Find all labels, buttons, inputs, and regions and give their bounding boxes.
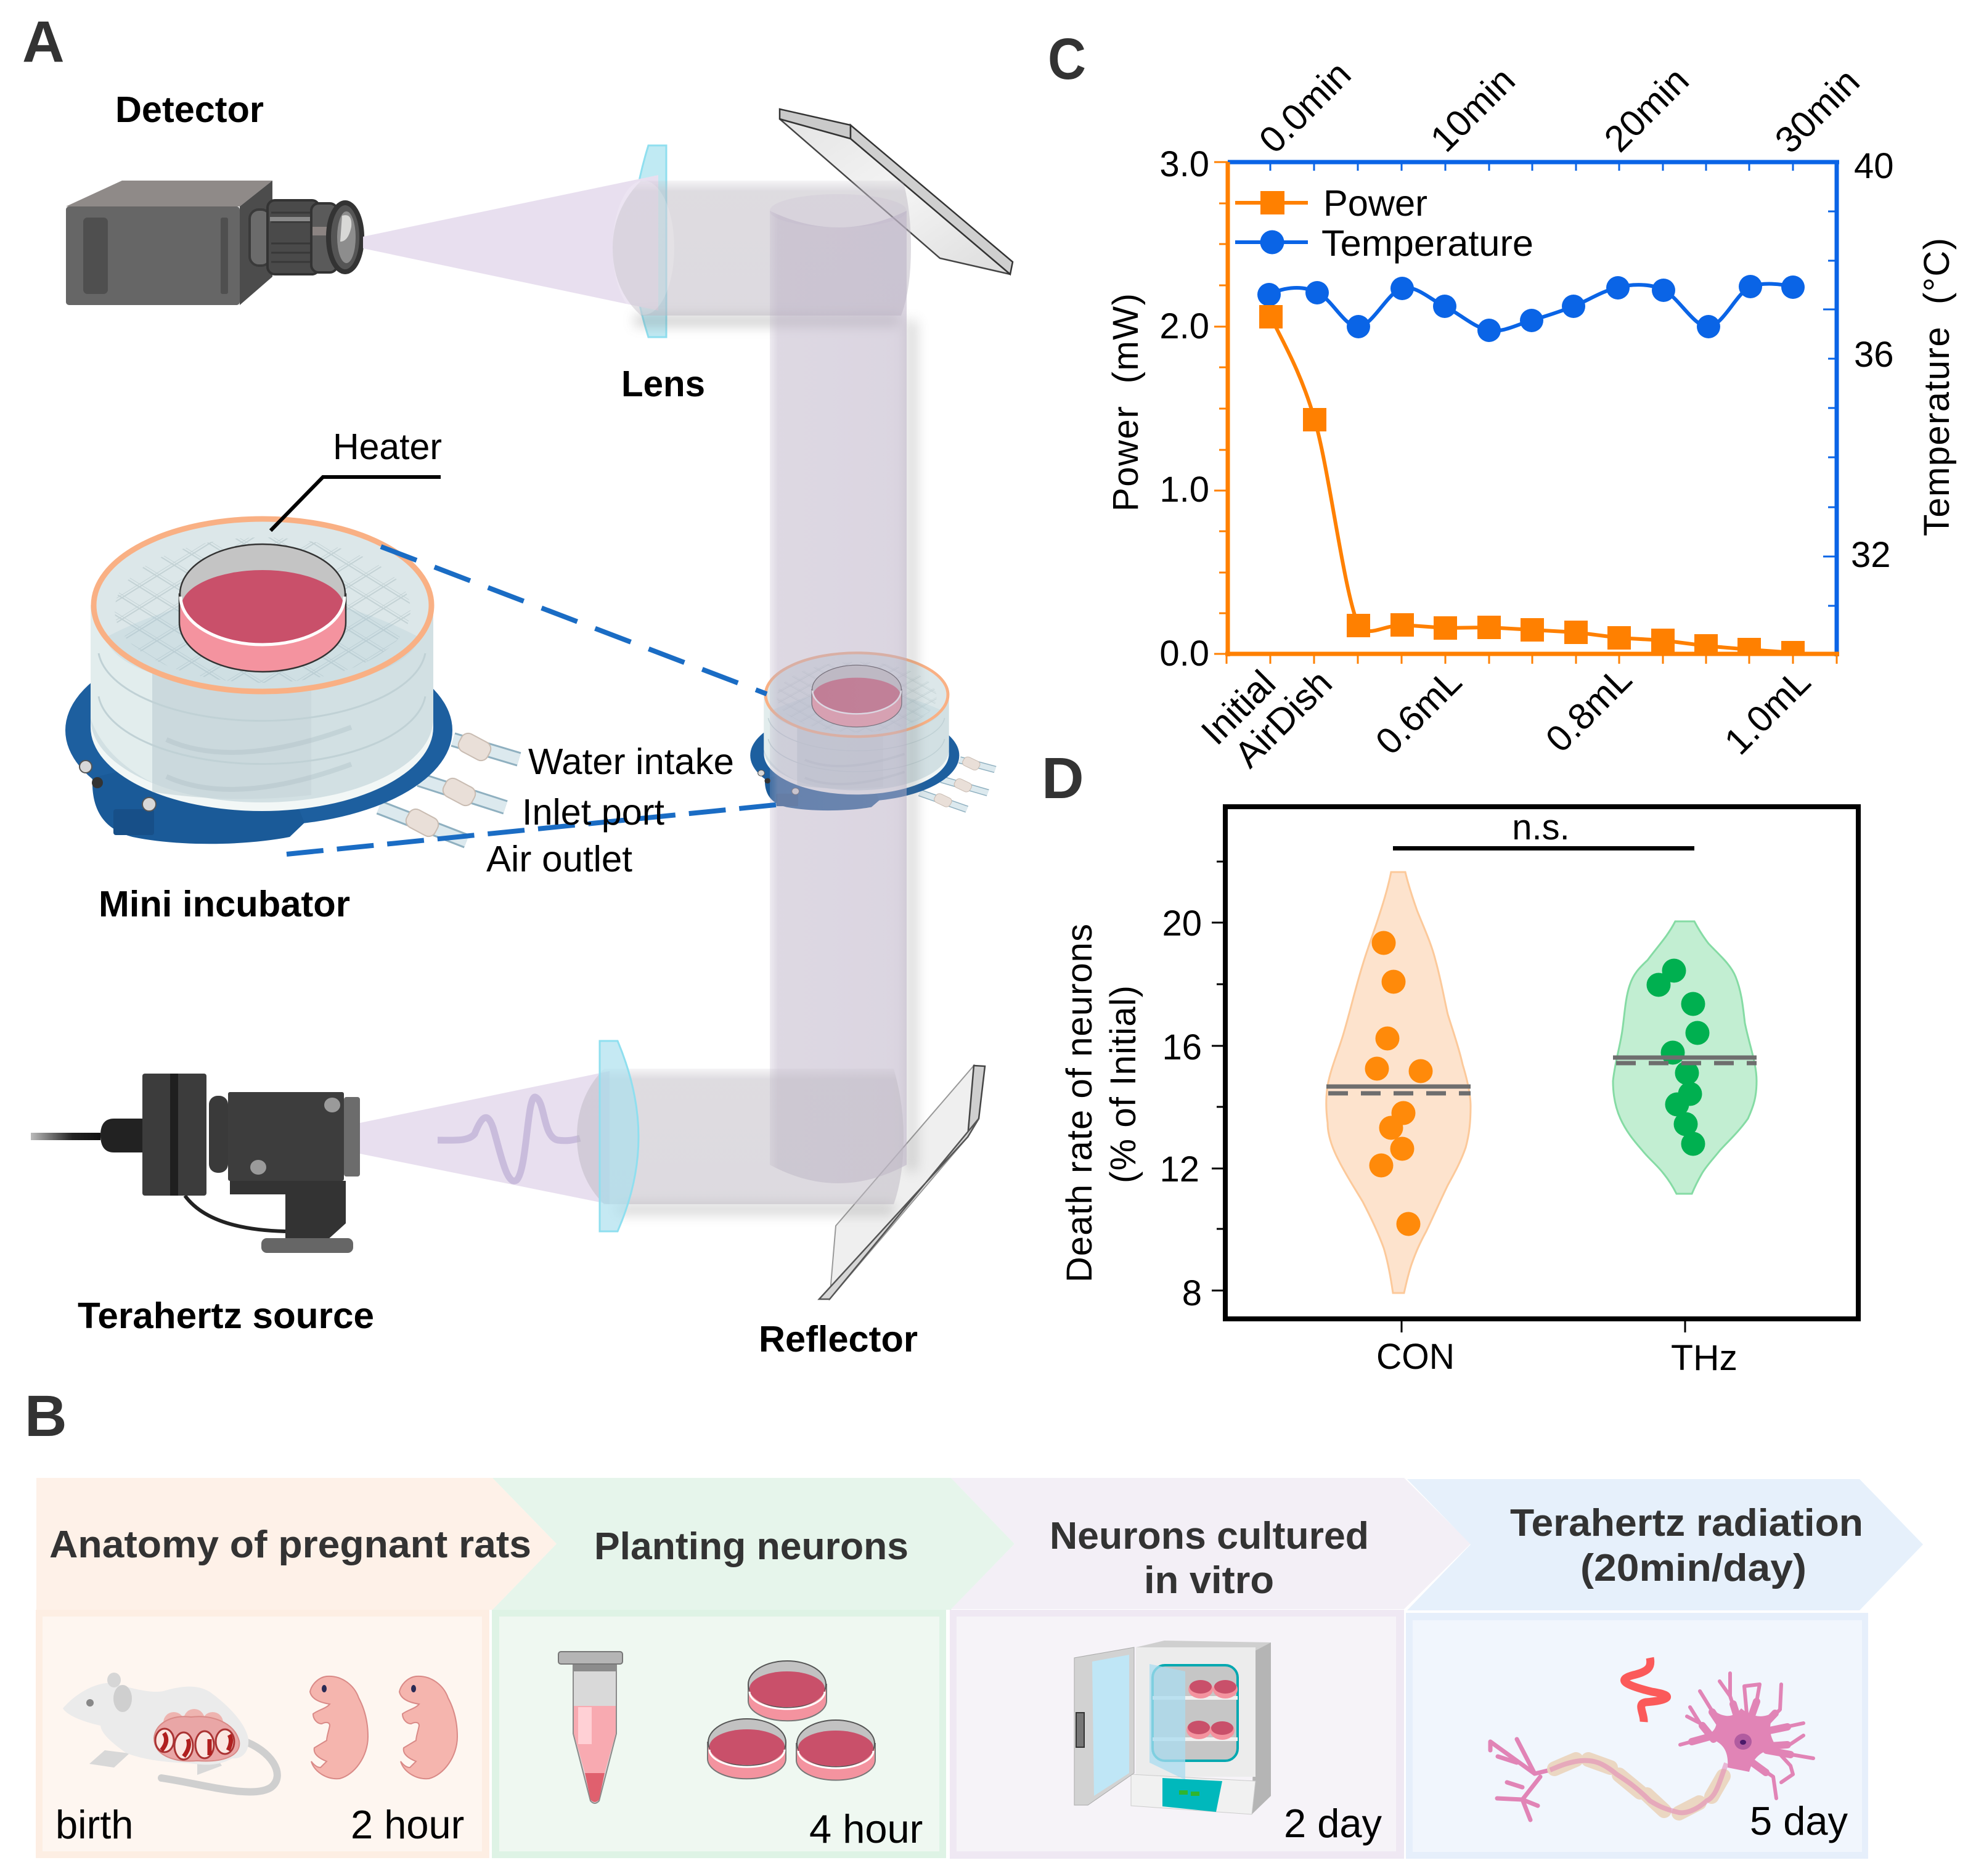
y axis tick labels: 20 xyxy=(1162,903,1202,944)
left and bottom axes xyxy=(1214,162,1839,664)
vertical beam xyxy=(770,194,917,1183)
y axis title xyxy=(1060,924,1143,1283)
tubes xyxy=(379,731,519,841)
violin CON xyxy=(1326,872,1471,1293)
step 3 card xyxy=(950,1610,1404,1859)
icon: three culture dishes xyxy=(708,1661,875,1780)
top axis labels: 20min xyxy=(1596,59,1697,160)
right axis title: Temperature (°C) xyxy=(1917,238,1957,536)
left axis title: Power (mW) xyxy=(1106,293,1146,512)
right axis tick labels: 32 xyxy=(1851,535,1891,575)
lower cone of light xyxy=(360,1071,610,1204)
y axis tick labels xyxy=(1159,903,1202,1313)
label: 2 day: 2 day xyxy=(1284,1801,1382,1846)
y axis tick labels: 8 xyxy=(1182,1273,1202,1313)
step 4 heading: (20min/day) xyxy=(1580,1547,1807,1589)
panel letter D: D xyxy=(1042,746,1084,811)
THz data points xyxy=(1647,959,1710,1156)
x axis label CON: CON xyxy=(1376,1337,1455,1377)
step 2 heading: Planting neurons xyxy=(594,1525,908,1568)
step 1 chevron xyxy=(36,1478,557,1610)
significance bar: n.s. xyxy=(1512,807,1570,847)
label: Air outlet: Air outlet xyxy=(486,839,632,879)
temperature series xyxy=(1257,275,1805,342)
label: Reflector: Reflector xyxy=(759,1319,918,1360)
step 4 card xyxy=(1406,1613,1868,1859)
label: Inlet port: Inlet port xyxy=(522,792,664,833)
x axis label THz: THz xyxy=(1671,1338,1737,1378)
top axis labels: 30min xyxy=(1767,60,1868,161)
lower horizontal beam xyxy=(577,1069,904,1213)
icon: terahertz wave xyxy=(1625,1658,1667,1722)
panel D: violin plot xyxy=(1042,746,1858,1378)
y axis title: (% of Initial) xyxy=(1103,985,1143,1183)
panel letter B: B xyxy=(25,1384,67,1449)
panel letter A: A xyxy=(22,9,65,75)
top axis labels xyxy=(1251,53,1868,161)
transparent housing xyxy=(91,520,433,811)
right axis tick labels: 36 xyxy=(1854,335,1894,375)
legend: Power xyxy=(1323,183,1427,224)
small mini incubator in the beam path xyxy=(750,653,995,810)
step 3 chevron xyxy=(951,1478,1471,1609)
lower reflector xyxy=(819,1066,985,1299)
violin THz xyxy=(1613,921,1757,1194)
mean and median lines xyxy=(1326,1058,1757,1093)
icon: detector camera xyxy=(66,181,362,305)
right axis tick labels xyxy=(1851,146,1894,575)
label: Heater: Heater xyxy=(333,426,442,467)
dashed zoom line lower xyxy=(287,804,782,854)
y axis tick labels: 12 xyxy=(1159,1149,1199,1189)
label: Terahertz source: Terahertz source xyxy=(78,1295,374,1336)
icon: terahertz source xyxy=(31,1074,360,1253)
power series xyxy=(1259,305,1805,654)
label: Detector: Detector xyxy=(115,89,264,130)
step 2 card xyxy=(492,1610,946,1858)
upper reflector xyxy=(780,109,1013,274)
step 1 heading: Anatomy of pregnant rats xyxy=(49,1523,531,1566)
icon: rat pups xyxy=(310,1676,457,1779)
terahertz waveform xyxy=(438,1097,580,1181)
bottom axis labels xyxy=(1193,658,1818,775)
step 1 card xyxy=(36,1610,489,1858)
step 2 chevron xyxy=(492,1478,1015,1610)
heater leader line xyxy=(271,477,441,531)
label: birth: birth xyxy=(55,1802,133,1847)
panel A: optical setup xyxy=(22,9,1013,1360)
icon: cell incubator xyxy=(1074,1641,1271,1814)
upper cone of light xyxy=(363,175,658,311)
mini incubator illustration xyxy=(65,519,519,844)
y axis tick labels: 16 xyxy=(1162,1027,1202,1067)
bottom axis labels: 1.0mL xyxy=(1717,661,1818,762)
icon: pregnant rat xyxy=(63,1673,277,1792)
panel C: power and temperature chart xyxy=(1048,27,1957,775)
top axis labels: 0.0min xyxy=(1251,53,1359,161)
left axis tick labels: 1.0 xyxy=(1159,470,1209,510)
step 4 heading: Terahertz radiation xyxy=(1510,1502,1863,1544)
panel letter C: C xyxy=(1048,27,1086,92)
step 3 heading xyxy=(1050,1515,1369,1602)
legend: Temperature xyxy=(1321,223,1533,264)
dashed zoom line upper xyxy=(381,547,767,694)
CON data points xyxy=(1365,931,1432,1236)
lower lens xyxy=(600,1041,639,1231)
bottom axis labels: 0.6mL xyxy=(1368,661,1469,762)
label: 4 hour: 4 hour xyxy=(809,1806,923,1851)
left axis tick labels xyxy=(1159,144,1209,674)
icon: centrifuge tube xyxy=(558,1652,623,1803)
top and right axes xyxy=(1228,162,1839,656)
plot frame xyxy=(1225,807,1858,1319)
blue clamp ring xyxy=(65,635,452,844)
bottom axis labels: 0.8mL xyxy=(1538,658,1639,760)
bottom axis labels: AirDish xyxy=(1227,662,1340,775)
step 3 heading: in vitro xyxy=(1144,1559,1274,1602)
upper horizontal beam xyxy=(613,181,911,325)
label: Lens: Lens xyxy=(621,364,705,404)
legend xyxy=(1235,183,1533,264)
culture dish xyxy=(179,544,346,672)
panel B: timeline xyxy=(25,1384,1923,1859)
heater ring xyxy=(94,519,431,691)
left axis tick labels: 0.0 xyxy=(1159,634,1209,674)
label: Water intake: Water intake xyxy=(528,741,734,782)
label: Mini incubator: Mini incubator xyxy=(99,884,350,924)
label: 2 hour: 2 hour xyxy=(351,1802,464,1847)
significance bar xyxy=(1393,807,1694,850)
left axis tick labels: 2.0 xyxy=(1159,306,1209,346)
left axis tick labels: 3.0 xyxy=(1159,144,1209,184)
y axis title: Death rate of neurons xyxy=(1060,924,1100,1283)
axis ticks xyxy=(1212,862,1685,1332)
step 3 heading: Neurons cultured xyxy=(1050,1515,1369,1557)
icon: neuron xyxy=(1490,1673,1813,1820)
label: 5 day: 5 day xyxy=(1750,1798,1848,1843)
step 4 chevron xyxy=(1407,1479,1923,1610)
bottom axis labels: Initial xyxy=(1193,663,1283,752)
upper lens xyxy=(632,145,666,337)
right axis tick labels: 40 xyxy=(1854,146,1894,186)
step 4 heading xyxy=(1510,1502,1863,1589)
top axis labels: 10min xyxy=(1423,59,1523,160)
